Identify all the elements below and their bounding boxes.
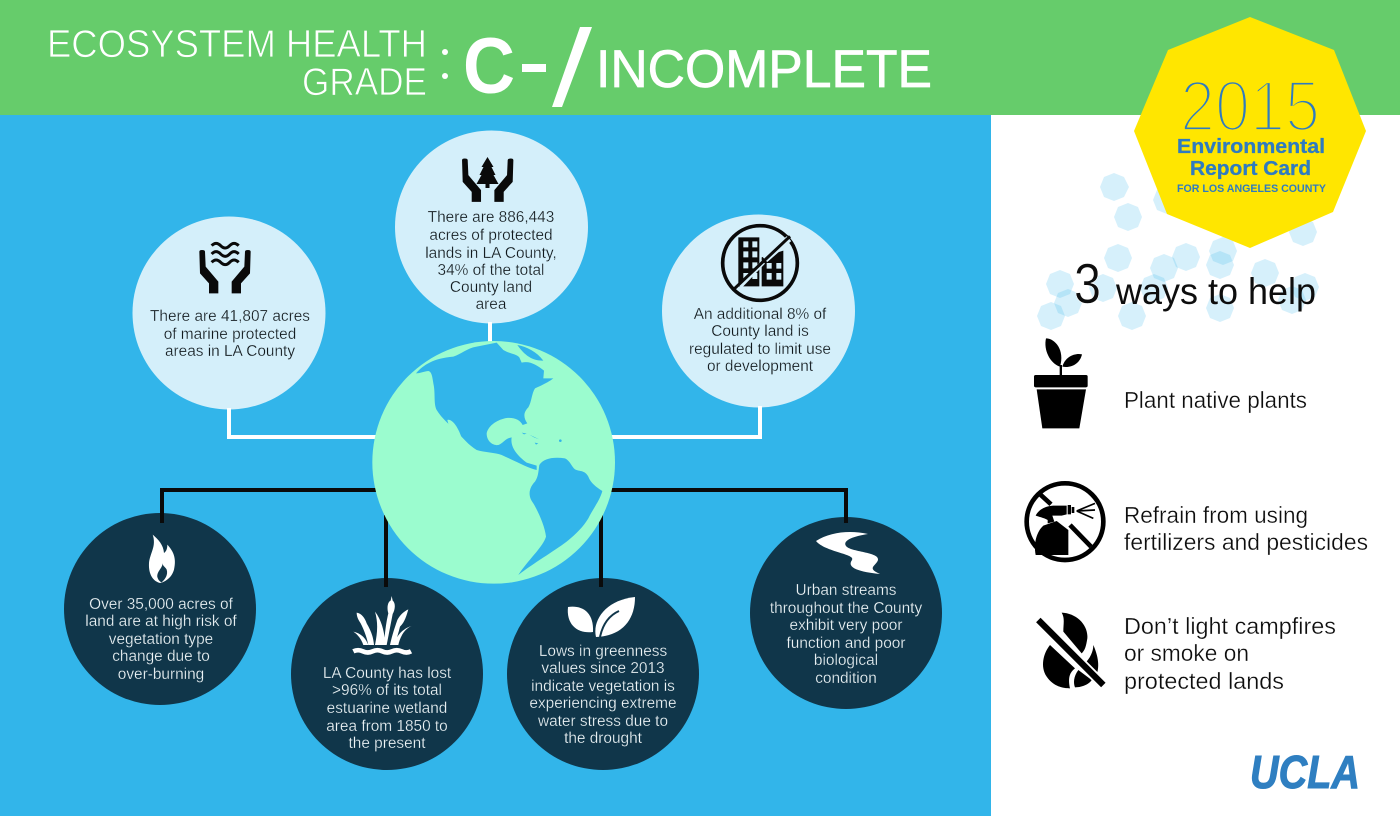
title xyxy=(47,20,932,110)
icon: flame xyxy=(149,535,175,583)
circle: regulated land: or development xyxy=(707,358,814,375)
circle: fire risk: land are at high risk of xyxy=(85,613,237,630)
icon: hands with waves xyxy=(199,243,251,293)
black connectors xyxy=(162,490,846,587)
icon: potted plant xyxy=(1034,338,1088,428)
heading: 3 ways to help: 3 xyxy=(1074,252,1101,316)
badge: 2015 xyxy=(1180,67,1320,147)
hudson water xyxy=(517,345,543,361)
circle: protected lands: 34% of the total xyxy=(438,262,544,279)
circle: regulated land: County land is xyxy=(711,323,809,340)
circle: marine protected xyxy=(132,216,326,410)
tip: campfires: Don’t light campfires xyxy=(1124,613,1336,639)
badge: Environmental xyxy=(1177,136,1325,158)
circle: fire risk: Over 35,000 acres of xyxy=(89,596,234,613)
logo: UCLA: UCLA xyxy=(1250,746,1360,798)
circle: wetland loss: estuarine wetland xyxy=(327,700,447,717)
tip: plant: Plant native plants xyxy=(1124,387,1307,413)
circle: greenness: Lows in greenness xyxy=(539,643,667,660)
circle: wetland loss: >96% of its total xyxy=(332,682,442,699)
circle: regulated land: regulated to limit use xyxy=(689,341,831,358)
circle: greenness: experiencing extreme xyxy=(529,695,677,712)
tip: campfires: or smoke on xyxy=(1124,640,1249,666)
circle: wetland loss: the present xyxy=(348,735,426,752)
circle: protected lands: County land xyxy=(450,279,532,296)
icon: stream xyxy=(816,532,880,574)
heading: 3 ways to help: ways to help xyxy=(1115,271,1316,312)
title: C xyxy=(463,20,515,110)
header band xyxy=(0,0,1400,115)
circle: fire risk: vegetation type xyxy=(109,631,213,648)
badge xyxy=(1134,17,1366,248)
title: INCOMPLETE xyxy=(596,40,932,99)
icon: no buildings xyxy=(723,226,797,300)
circle: urban streams: exhibit very poor xyxy=(790,617,902,634)
icon: no fire xyxy=(1038,613,1103,688)
north america xyxy=(416,343,553,470)
circle: fire risk xyxy=(64,513,256,705)
title: ECOSYSTEM HEALTH xyxy=(47,23,427,66)
white connectors xyxy=(229,322,760,437)
title: GRADE xyxy=(302,61,427,104)
circle: wetland loss: area from 1850 to xyxy=(326,718,448,735)
tip: fertilizers: Refrain from using xyxy=(1124,502,1308,528)
circle: greenness xyxy=(507,578,699,770)
circle: regulated land: An additional 8% of xyxy=(694,306,827,323)
caribbean xyxy=(522,433,562,445)
circle: protected lands: lands in LA County, xyxy=(425,245,557,262)
circle: urban streams: throughout the County xyxy=(770,600,922,617)
blue main panel xyxy=(0,115,991,816)
badge: FOR LOS ANGELES COUNTY xyxy=(1177,183,1327,195)
circle: fire risk: over-burning xyxy=(118,666,204,683)
circle: regulated land xyxy=(662,214,855,408)
circle: fire risk: change due to xyxy=(112,648,210,665)
baja xyxy=(447,420,462,440)
badge: Report Card xyxy=(1190,158,1311,180)
circle: urban streams: function and poor xyxy=(787,635,905,652)
bubbles decoration xyxy=(1037,173,1319,330)
circle: protected lands: area xyxy=(476,296,507,313)
circle: urban streams xyxy=(750,517,942,709)
icon: hands with tree xyxy=(462,157,513,202)
circle: marine protected: areas in LA County xyxy=(165,343,295,360)
heading: 3 ways to help xyxy=(1074,252,1316,316)
tip: campfires: protected lands xyxy=(1124,668,1284,694)
circle: protected lands xyxy=(395,130,588,324)
icon: leaves xyxy=(568,597,635,637)
circle: wetland loss: LA County has lost xyxy=(323,665,452,682)
circle: wetland loss xyxy=(291,578,483,770)
globe xyxy=(372,341,615,584)
circle: greenness: indicate vegetation is xyxy=(531,678,675,695)
circle: protected lands: acres of protected xyxy=(429,227,553,244)
circle: greenness: values since 2013 xyxy=(541,660,665,677)
circle: urban streams: condition xyxy=(815,670,877,687)
south america xyxy=(518,458,602,575)
circle: marine protected: There are 41,807 acres xyxy=(150,308,310,325)
circle: marine protected: of marine protected xyxy=(164,326,296,343)
circle: greenness: water stress due to xyxy=(537,713,668,730)
icon: no spray xyxy=(1027,483,1103,560)
tip: fertilizers: fertilizers and pesticides xyxy=(1124,529,1368,555)
icon: reeds xyxy=(353,596,412,652)
circle: greenness: the drought xyxy=(564,730,643,747)
circle: urban streams: Urban streams xyxy=(796,582,897,599)
circle: urban streams: biological xyxy=(814,652,878,669)
circle: protected lands: There are 886,443 xyxy=(428,209,554,226)
